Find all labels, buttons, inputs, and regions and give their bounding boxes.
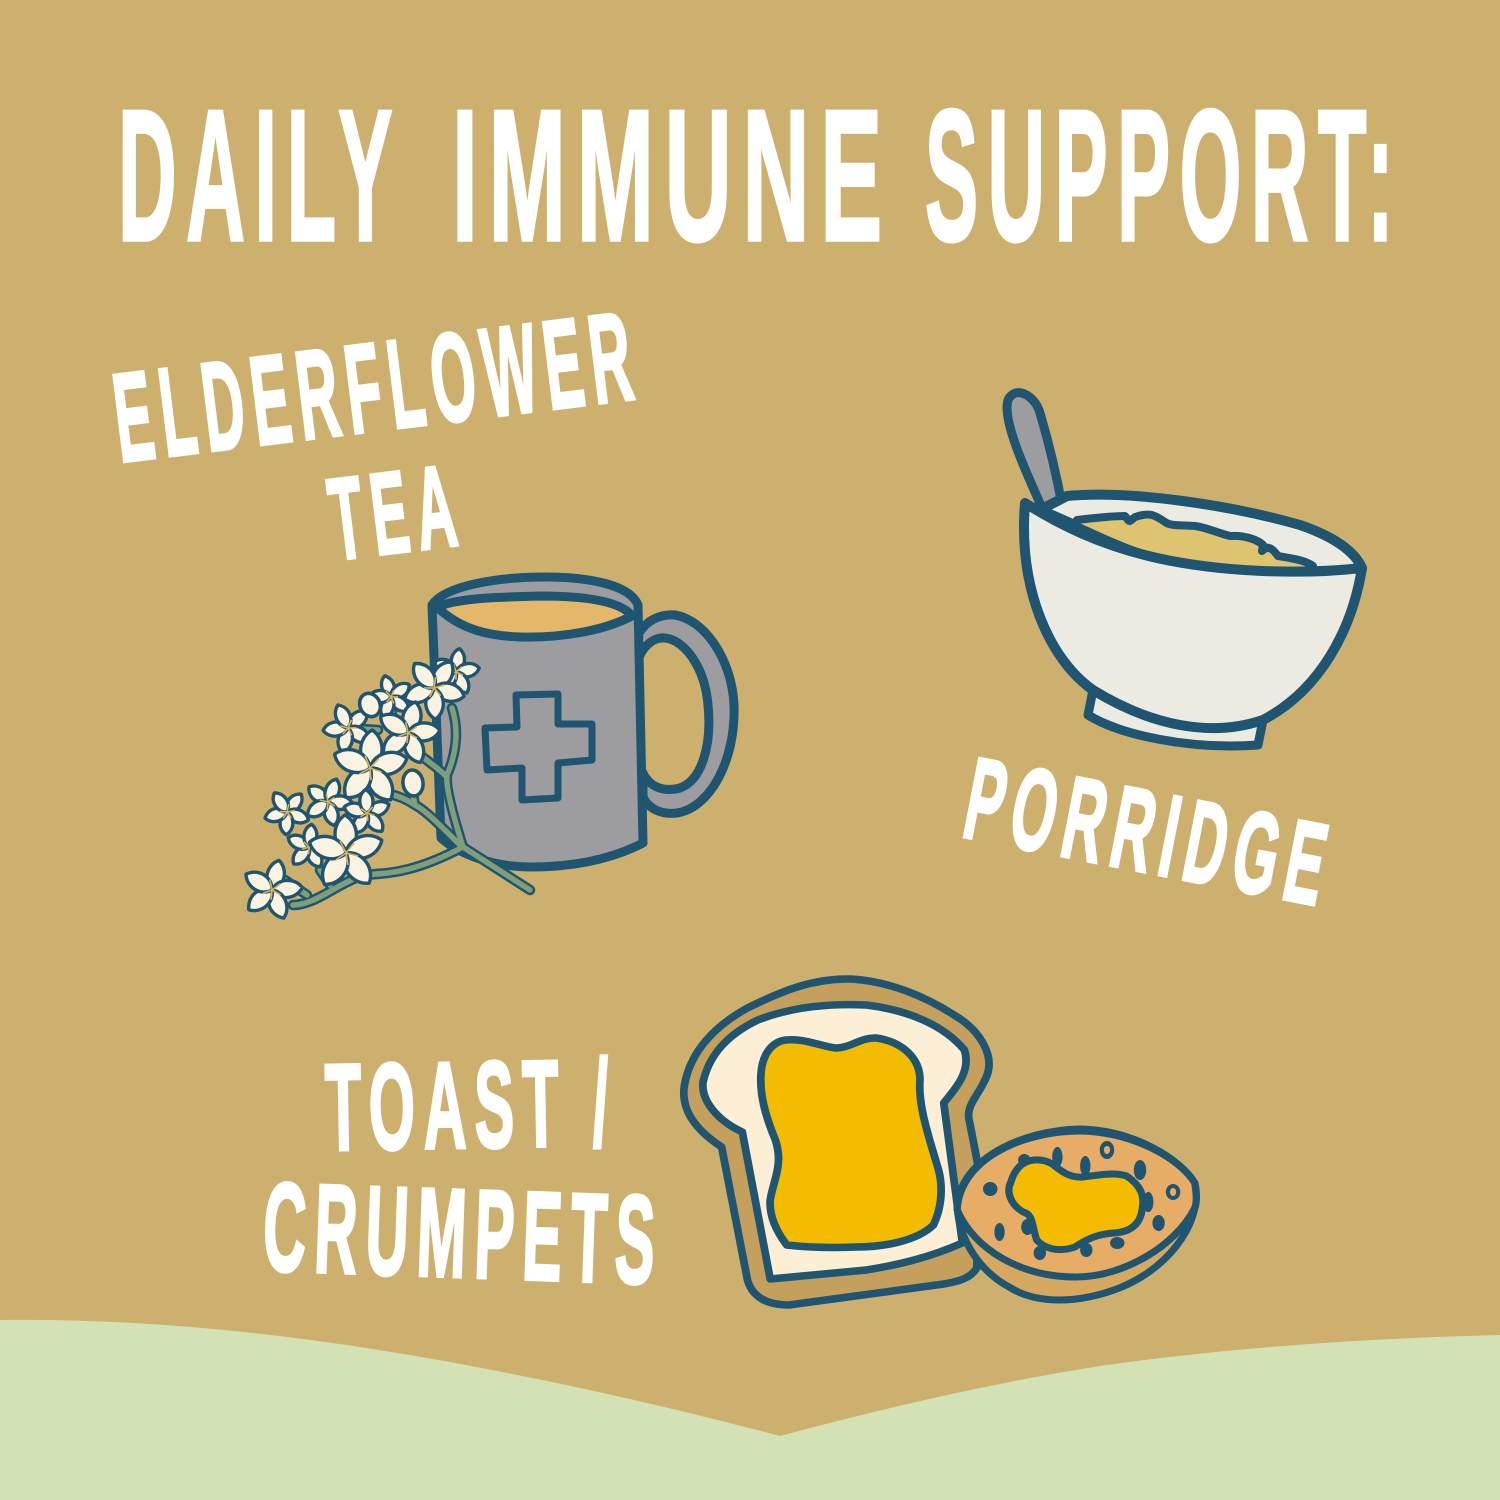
- flower buds: [356, 690, 425, 797]
- bowl foot: [1088, 690, 1263, 746]
- green wave footer: [0, 1320, 1500, 1500]
- crumpet side: [957, 1129, 1196, 1300]
- icon: porridge bowl: [1007, 393, 1362, 746]
- bowl inside: [1040, 495, 1362, 572]
- title: [118, 71, 1403, 280]
- icon: toast with butter: [684, 979, 1196, 1305]
- crumpet butter: [1009, 1160, 1143, 1250]
- icon: mug with elderflower: [234, 577, 734, 927]
- title: IMMUNE: [452, 71, 893, 280]
- label: elderflower tea: TEA: [322, 439, 471, 585]
- crumpet holes: [983, 1141, 1180, 1260]
- spoon: [1007, 393, 1065, 522]
- crumpet top: [957, 1131, 1196, 1277]
- text: CRUMPETS: [261, 1156, 666, 1311]
- mug body: [432, 577, 643, 867]
- label: elderflower tea: [106, 285, 647, 585]
- toast face: [703, 1005, 966, 1279]
- title: DAILY: [118, 71, 402, 280]
- toast crust: [684, 979, 989, 1305]
- porridge: [1077, 514, 1313, 568]
- elderflower stems: [285, 700, 530, 905]
- label: toast / crumpets: TOAST /: [324, 1035, 618, 1177]
- text: ELDERFLOWER: [106, 285, 647, 489]
- mug handle: [637, 615, 734, 813]
- mug rim: [436, 596, 632, 637]
- crumpet: [957, 1129, 1196, 1300]
- toast butter: [761, 1038, 941, 1247]
- tea surface: [440, 596, 630, 636]
- bowl body: [1024, 503, 1362, 728]
- label: toast / crumpets: [261, 1035, 666, 1311]
- cross emblem: [485, 694, 592, 800]
- elderflower blossoms: [428, 645, 484, 699]
